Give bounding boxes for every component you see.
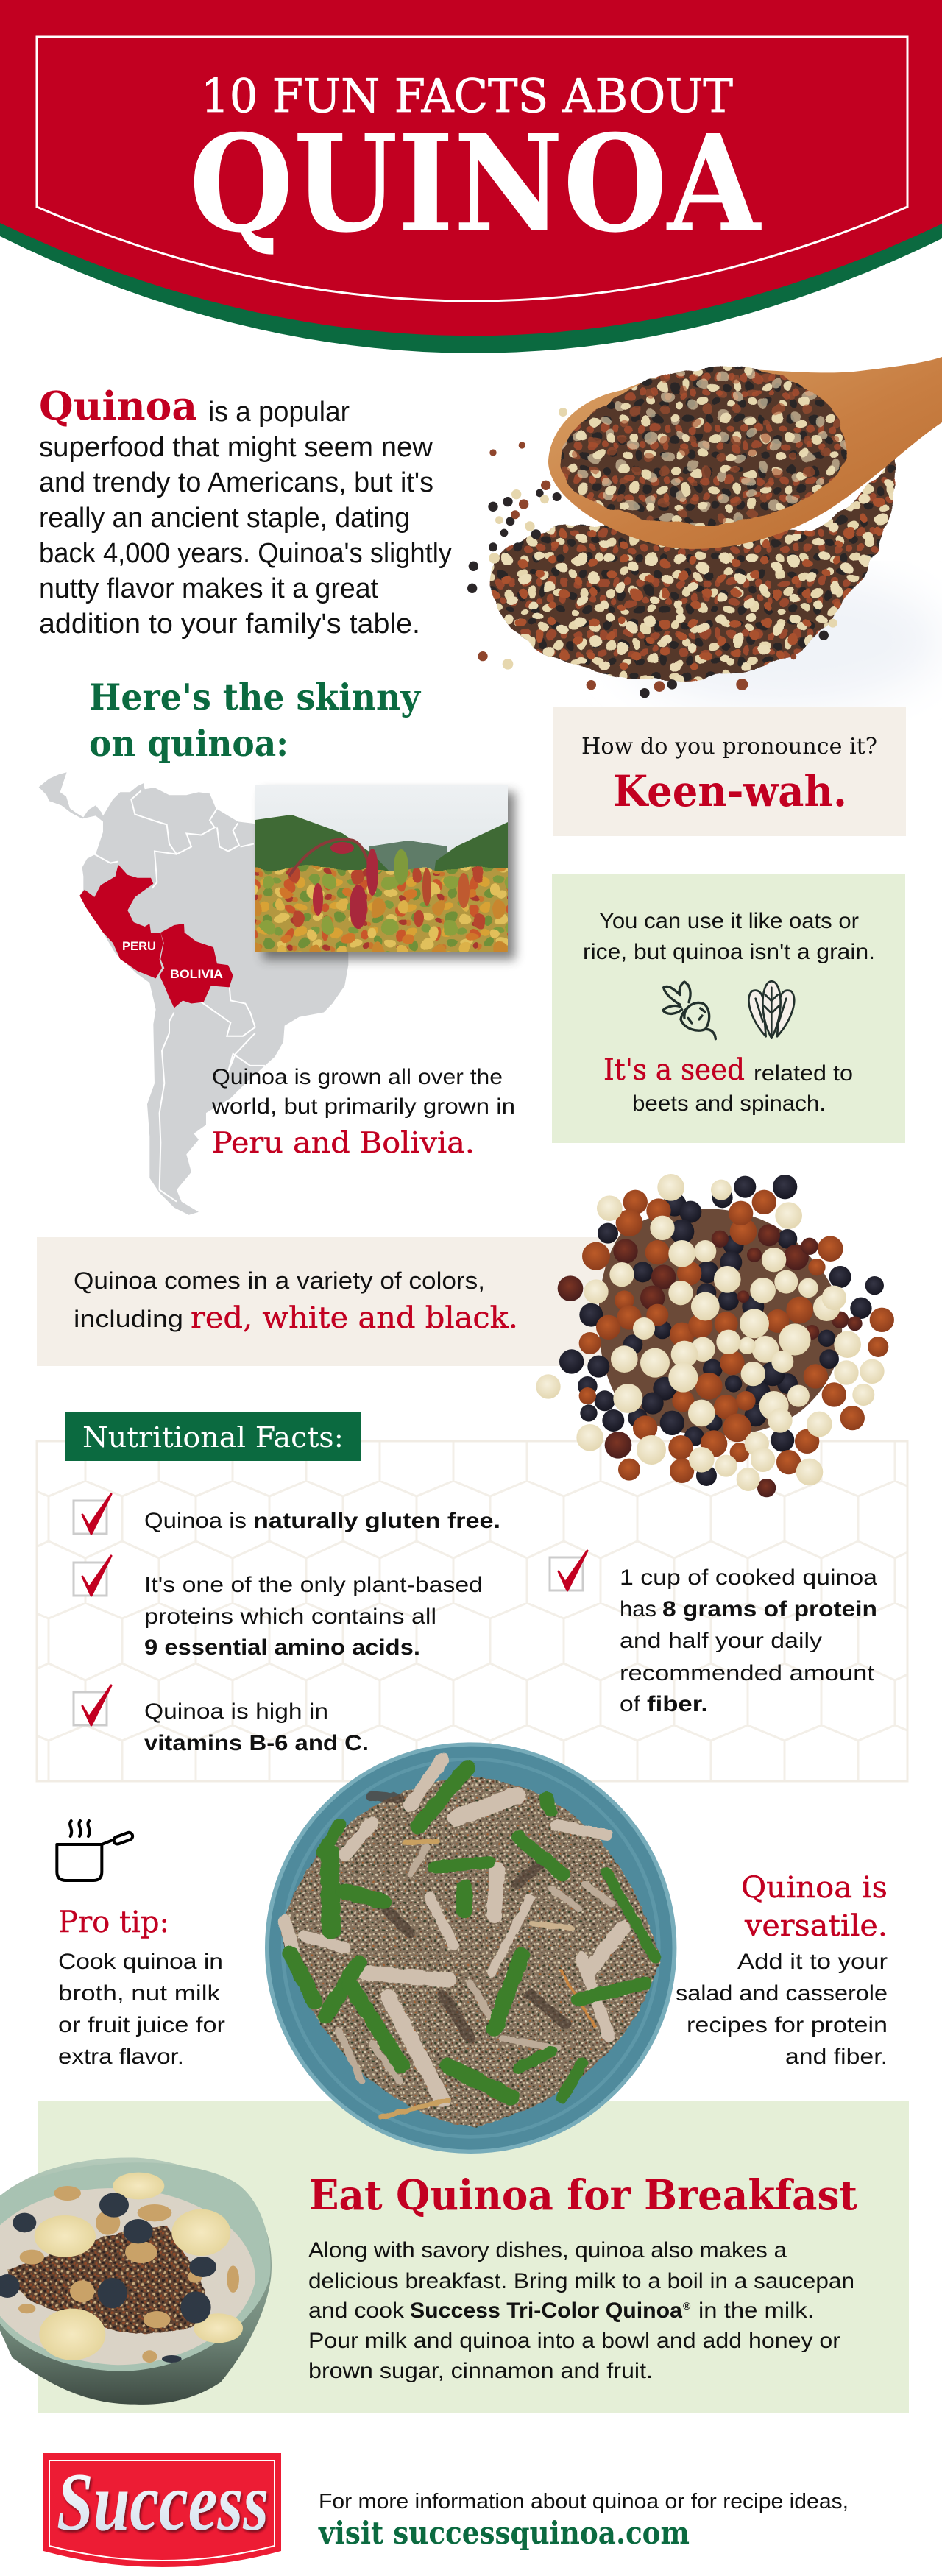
fact: protein and fiber: recommended amount xyxy=(620,1661,875,1685)
fact: protein and fiber: fiber. xyxy=(647,1692,708,1716)
header banner xyxy=(0,0,942,353)
fact: vitamins: vitamins B-6 and C. xyxy=(144,1731,369,1755)
green beans xyxy=(290,1768,655,2098)
breakfast body text: brown sugar, cinnamon and fruit. xyxy=(308,2359,653,2383)
map: South America: PERU xyxy=(122,939,156,953)
walnuts xyxy=(18,2186,239,2363)
region: Peru xyxy=(79,865,163,978)
photo: breakfast bowl xyxy=(0,2158,272,2405)
photo: salad bowl xyxy=(267,1744,674,2151)
map caption: Quinoa is grown all over the xyxy=(212,1065,503,1089)
panel: it's a seed: You can use it like oats or xyxy=(599,909,859,933)
photo: quinoa field xyxy=(243,785,523,964)
quinoa is versatile: versatile. xyxy=(744,1909,888,1943)
fact: amino acids: proteins which contains all xyxy=(144,1604,436,1629)
fact: amino acids: 9 essential amino acids. xyxy=(144,1635,420,1660)
icon: beet xyxy=(663,982,715,1039)
heading: nutritional facts xyxy=(65,1412,361,1461)
logo: Success: Success xyxy=(57,2457,269,2548)
map: South America xyxy=(39,772,348,1215)
fact: protein and fiber: and half your daily xyxy=(620,1629,822,1653)
checkmark 4 xyxy=(550,1551,587,1590)
fact: gluten free xyxy=(144,1509,500,1533)
intro text: and trendy to Americans, but it's xyxy=(39,467,433,498)
fact: protein and fiber: 1 cup of cooked quinoa xyxy=(620,1565,877,1590)
map caption: Peru and Bolivia. xyxy=(212,1127,475,1160)
quinoa is versatile: recipes for protein xyxy=(687,2013,888,2037)
pro tip: Pro tip: xyxy=(58,1906,169,1939)
intro text: nutty flavor makes it a great xyxy=(39,573,378,604)
breakfast body text: in the milk. xyxy=(698,2299,814,2323)
quinoa is versatile: Add it to your xyxy=(737,1950,888,1974)
breakfast body text: Along with savory dishes, quinoa also makes a xyxy=(308,2238,787,2262)
checkmark 3 xyxy=(74,1685,111,1725)
panel: it's a seed: It's a seed xyxy=(603,1053,745,1087)
pro tip: Cook quinoa in xyxy=(58,1950,223,1974)
map caption xyxy=(211,1065,515,1160)
map: South America: BOLIVIA xyxy=(170,967,223,981)
title: QUINOA xyxy=(189,105,762,262)
fact: protein and fiber: of xyxy=(620,1692,641,1716)
pro tip: extra flavor. xyxy=(58,2045,184,2069)
quinoa is versatile: and fiber. xyxy=(785,2045,888,2069)
breakfast body text: and cook xyxy=(308,2299,405,2323)
panel: it's a seed: rice, but quinoa isn't a grain. xyxy=(583,940,875,964)
pro tip: broth, nut milk xyxy=(58,1981,221,2006)
panel: pronunciation: How do you pronounce it? xyxy=(581,734,877,760)
panel: pronunciation: Keen-wah. xyxy=(613,766,847,816)
heading: breakfast: Eat Quinoa for Breakfast xyxy=(309,2171,857,2220)
fact: protein and fiber: has xyxy=(620,1597,656,1621)
pro tip xyxy=(58,1906,225,2069)
panel: it's a seed xyxy=(552,874,905,1143)
icon: spinach xyxy=(748,981,794,1038)
panel: it's a seed: beets and spinach. xyxy=(632,1091,826,1116)
panel: pronunciation xyxy=(553,707,906,836)
breakfast body text: delicious breakfast. Bring milk to a boil in a saucepan xyxy=(308,2269,854,2293)
title: 10 FUN FACTS ABOUT xyxy=(201,69,733,123)
heading: skinny on quinoa: on quinoa: xyxy=(89,722,288,765)
checkmark 2 xyxy=(74,1556,111,1596)
region: Bolivia xyxy=(160,924,233,1008)
fact: gluten free: Quinoa is xyxy=(144,1509,247,1533)
intro text: is a popular xyxy=(208,397,350,428)
panel: it's a seed: related to xyxy=(754,1061,853,1086)
intro text: superfood that might seem new xyxy=(39,432,433,463)
fact: amino acids: It's one of the only plant-based xyxy=(144,1573,483,1597)
quinoa is versatile: Quinoa is xyxy=(741,1871,888,1905)
footer text: visit successquinoa.com xyxy=(318,2515,690,2551)
map caption: world, but primarily grown in xyxy=(211,1094,515,1119)
panel: nutritional facts xyxy=(37,1412,907,1781)
quinoa is versatile xyxy=(676,1871,888,2069)
pro tip: or fruit juice for xyxy=(58,2013,225,2037)
footer text: For more information about quinoa or for recipe ideas, xyxy=(319,2490,849,2513)
fact: protein and fiber: 8 grams of protein xyxy=(662,1597,877,1621)
banana slices xyxy=(35,2173,243,2360)
photo: quinoa in wooden spoon xyxy=(467,357,942,707)
intro text: really an ancient staple, dating xyxy=(39,503,410,534)
fact: gluten free: naturally gluten free. xyxy=(253,1509,500,1533)
breakfast body text: Success Tri-Color Quinoa xyxy=(410,2299,682,2323)
breakfast body text xyxy=(308,2238,854,2383)
fact: vitamins xyxy=(144,1699,369,1755)
panel: eat quinoa for breakfast xyxy=(38,2101,909,2413)
heading: skinny on quinoa: Here's the skinny xyxy=(89,676,421,718)
logo: Success xyxy=(43,2453,281,2567)
breakfast body text: Pour milk and quinoa into a bowl and add honey or xyxy=(308,2329,840,2353)
heading: skinny on quinoa xyxy=(89,676,421,765)
chicken strands xyxy=(285,1759,623,2117)
icon: steaming pot xyxy=(57,1821,134,1880)
fact: vitamins: Quinoa is high in xyxy=(144,1699,328,1724)
panel: colors: including xyxy=(74,1306,183,1332)
checkmark 1 xyxy=(74,1494,111,1534)
panel: colors: Quinoa comes in a variety of colors, xyxy=(74,1267,485,1294)
breakfast body text: ® xyxy=(683,2300,691,2312)
panel: colors xyxy=(37,1237,626,1366)
intro text: back 4,000 years. Quinoa's slightly xyxy=(39,538,452,569)
photo: tri-color quinoa seeds xyxy=(536,1174,894,1497)
intro text: Quinoa xyxy=(39,383,197,429)
quinoa is versatile: salad and casserole xyxy=(676,1981,888,2006)
blueberries xyxy=(0,2193,216,2363)
fact: amino acids xyxy=(144,1573,483,1660)
fact: protein and fiber xyxy=(620,1565,877,1716)
intro text xyxy=(39,383,452,640)
footer text xyxy=(318,2490,849,2551)
panel: colors: red, white and black. xyxy=(191,1301,518,1335)
heading: nutritional facts: Nutritional Facts: xyxy=(82,1421,344,1454)
intro text: addition to your family's table. xyxy=(39,609,420,640)
